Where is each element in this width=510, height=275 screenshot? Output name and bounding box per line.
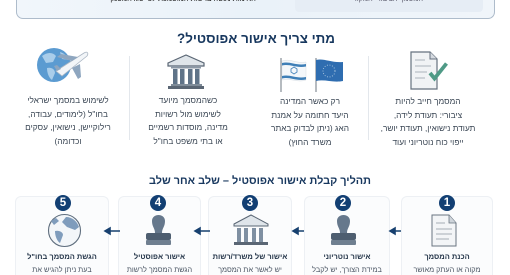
divider between first columns [368,56,369,140]
card: step 4 [118,196,201,275]
icon: document with check [410,51,448,90]
text: use abroad: וכדומה) [54,136,82,146]
icons: step icons and arrows [48,214,456,247]
arrow 3 to 4 [195,228,210,234]
step 3 text: יש לאשר את המסמך [218,265,282,274]
text: public document [381,96,475,147]
text: destination state: היעד חתומה על אמנת [271,110,349,120]
text: public document: המסמך חייב להיות [395,96,461,106]
text: official use: כשהמסמך מיועד [159,95,217,105]
number 5: 5 [60,197,66,209]
number 4 [150,195,166,211]
heading: when is an apostille needed: מתי צריך אישור אפוסטיל? [177,31,335,46]
card: step 1 [401,196,493,275]
step 5 text: בעת ניתן להגיש את [32,265,92,274]
text: public document: ציבורי: תעודת לידה, [394,110,462,120]
step 1 text: מקוה או העתק מאושר [413,265,481,274]
panel: top summary box [16,0,495,19]
icon: document [432,215,456,246]
text: use abroad: רילוקיישן, נישואין, עסקים [25,122,111,132]
step 4 title: אישור אפוסטיל [134,252,185,261]
icon: stamp apostille [146,215,171,245]
step 1 title: הכנת המסמך [424,252,470,261]
step 3 title: אישור של משרד/רשות [213,252,287,261]
arrow 1 to 2 [390,228,401,234]
number 3 [242,195,258,211]
heading: step by step process: תהליך קבלת אישור אפוסטיל – שלב אחר שלב [149,175,371,187]
text: official use: או בתי משפט בחו"ל [153,136,223,146]
number 3: 3 [247,197,253,209]
number 2: 2 [340,197,346,209]
arrow 4 to 5 [105,228,120,234]
card: step 3 [208,196,292,275]
number 4: 4 [155,197,161,209]
inner highlight panel [295,0,483,12]
arrow 2 to 3 [293,228,304,234]
text: use abroad: לשימוש במסמך ישראלי [27,95,109,105]
text: official use [148,95,228,146]
icon: building [234,215,268,245]
text: use abroad [25,95,111,146]
text: use abroad: בחו"ל (לימודים, עבודה, [28,109,108,119]
text: destination state [271,96,349,147]
number 1 [439,195,455,211]
step 5 title: הגשת המסמך בחו"ל [27,252,97,261]
text: official use: לשימוש מול רשויות [155,109,221,119]
text: public document: ייפוי כוח נוטריוני ועוד [392,137,464,147]
text: public document: תעודת נישואין, תעודת יושר, [381,123,475,133]
step 2 title: אישור נוטריוני [323,252,371,261]
text: official use: מדינה, מוסדות רשמיים [148,122,228,132]
step 2 text: במידת הצורך, יש לקבל [312,265,382,274]
card: step 2 [304,196,390,275]
number 2 [335,195,351,211]
text: destination state: רק כאשר המדינה [280,96,340,106]
number 5 [55,195,71,211]
step 4 text: הגשת המסמך לרשות [127,265,192,274]
icon: stamp notary [331,215,356,245]
divider between last columns [129,56,130,140]
icon: globe [48,214,80,246]
number 1: 1 [444,197,450,209]
icon: government building [167,54,205,89]
text: destination state: האג (ניתן לבדוק באתר [271,123,349,133]
card: step 5 [15,196,109,275]
icon: globe and airplane [37,48,88,82]
icon: Israel and EU flags [280,58,343,92]
text: destination state: משרד החוץ) [289,137,331,147]
